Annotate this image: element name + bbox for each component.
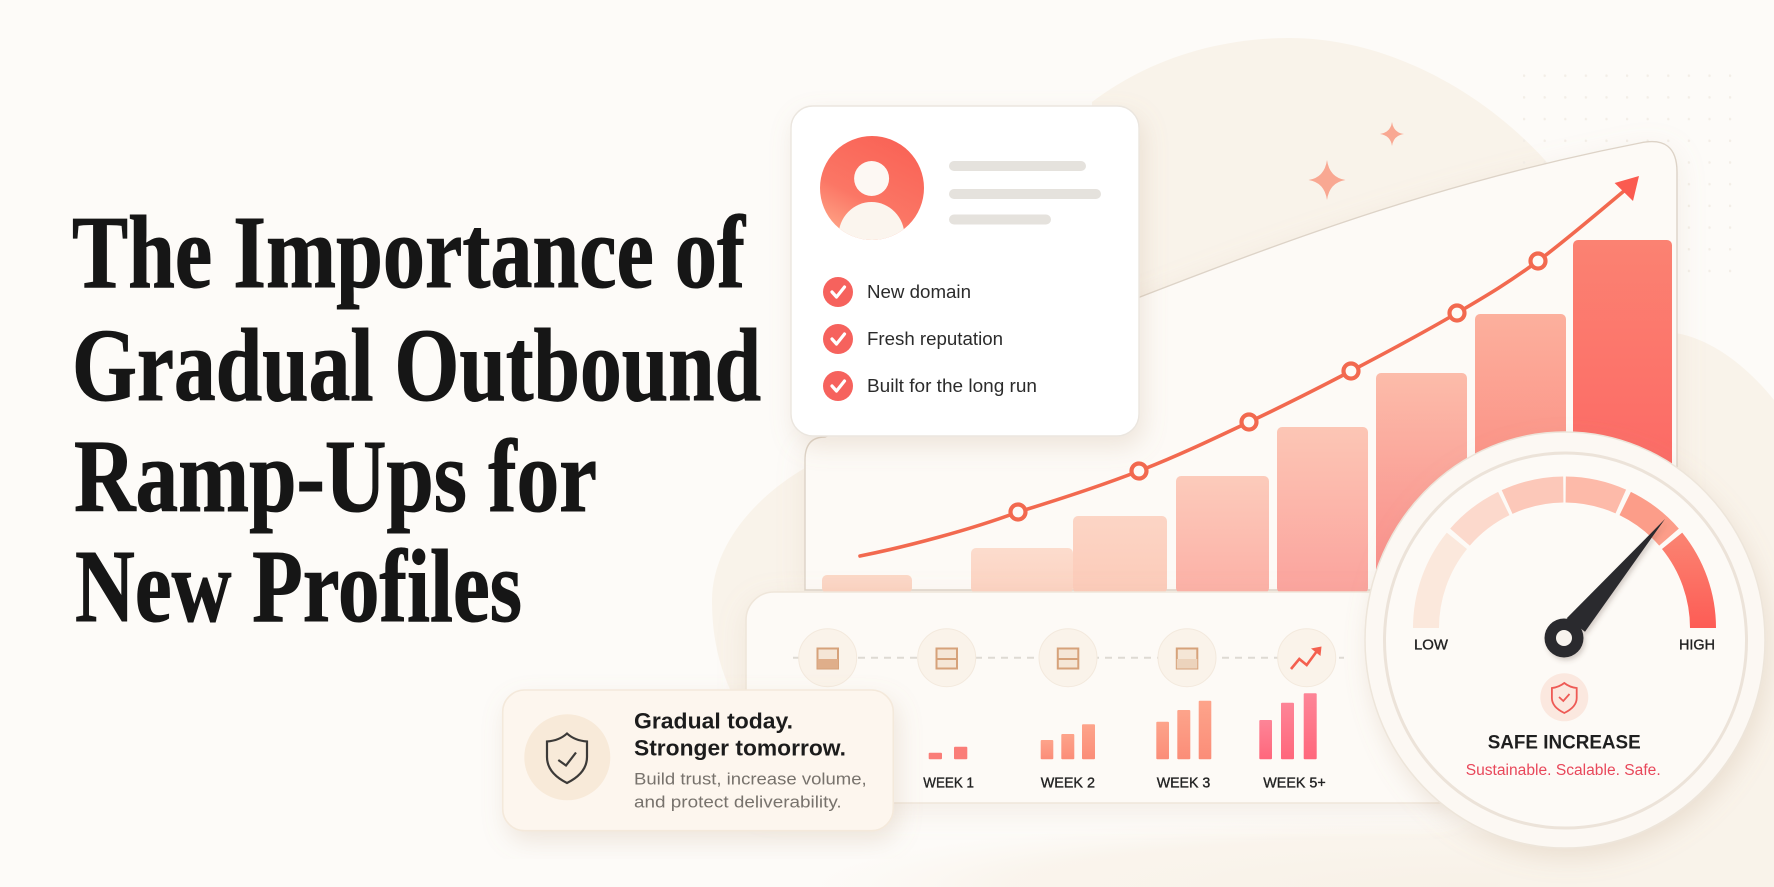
title: New Profiles bbox=[75, 529, 522, 644]
gauge: safe increase bbox=[1365, 432, 1765, 848]
title bbox=[72, 195, 761, 644]
week 2 mini bars bbox=[1041, 724, 1095, 759]
sparkle icons bbox=[1308, 122, 1404, 200]
panel: weekly timeline bbox=[746, 592, 1466, 803]
gauge heading: SAFE INCREASE bbox=[1488, 731, 1641, 753]
panel: growth chart bbox=[805, 142, 1677, 593]
icon: shield check bbox=[524, 714, 610, 800]
callout body text bbox=[634, 769, 867, 812]
icon: red shield check bbox=[1540, 673, 1588, 721]
week 1 mini bars bbox=[929, 747, 967, 759]
checklist item: fresh reputation: Fresh reputation bbox=[867, 329, 1003, 349]
icon: week 4 step bbox=[1158, 629, 1216, 687]
gauge subtext: Sustainable. Scalable. Safe. bbox=[1466, 762, 1661, 779]
callout heading: Gradual today. bbox=[634, 708, 793, 733]
background blobs bbox=[712, 38, 1774, 887]
background dot grid bbox=[1523, 65, 1733, 290]
week labels: WEEK 2 bbox=[1041, 775, 1095, 791]
title: The Importance of bbox=[72, 195, 746, 310]
week 3 mini bars bbox=[1156, 701, 1211, 759]
callout body text: Build trust, increase volume, bbox=[634, 769, 867, 788]
icon: week 1 step bbox=[799, 629, 857, 687]
icon: week 3 step bbox=[1039, 629, 1097, 687]
checklist item: built for the long run bbox=[823, 371, 1037, 401]
panel: new profile card bbox=[791, 106, 1139, 436]
week 5+ mini bars bbox=[1259, 693, 1317, 759]
week labels: WEEK 5+ bbox=[1263, 775, 1326, 791]
week labels: WEEK 1 bbox=[923, 775, 974, 791]
callout: gradual today bbox=[503, 690, 893, 831]
gauge high label: HIGH bbox=[1679, 636, 1715, 653]
bar chart: weekly volume bbox=[822, 240, 1672, 593]
gauge scale arc bbox=[1426, 490, 1703, 628]
gauge needle bbox=[1544, 519, 1665, 658]
icon: week 2 step bbox=[918, 629, 976, 687]
checklist item: new domain: New domain bbox=[867, 282, 971, 302]
title: Gradual Outbound bbox=[72, 308, 761, 423]
checklist item: fresh reputation bbox=[823, 324, 1003, 354]
callout body text: and protect deliverability. bbox=[634, 793, 842, 812]
checklist item: built for the long run: Built for the long run bbox=[867, 376, 1037, 396]
gauge low label: LOW bbox=[1414, 636, 1449, 653]
title: Ramp-Ups for bbox=[74, 419, 597, 534]
checklist item: new domain bbox=[823, 277, 971, 307]
icon: rising trend arrow bbox=[1278, 629, 1336, 687]
growth trend line with arrow bbox=[860, 176, 1639, 556]
icon: profile avatar bbox=[820, 136, 924, 240]
week labels: WEEK 3 bbox=[1157, 775, 1210, 791]
placeholder text lines bbox=[949, 161, 1101, 224]
callout heading: Stronger tomorrow. bbox=[634, 736, 846, 761]
week labels bbox=[923, 775, 1326, 791]
callout heading bbox=[634, 708, 846, 761]
